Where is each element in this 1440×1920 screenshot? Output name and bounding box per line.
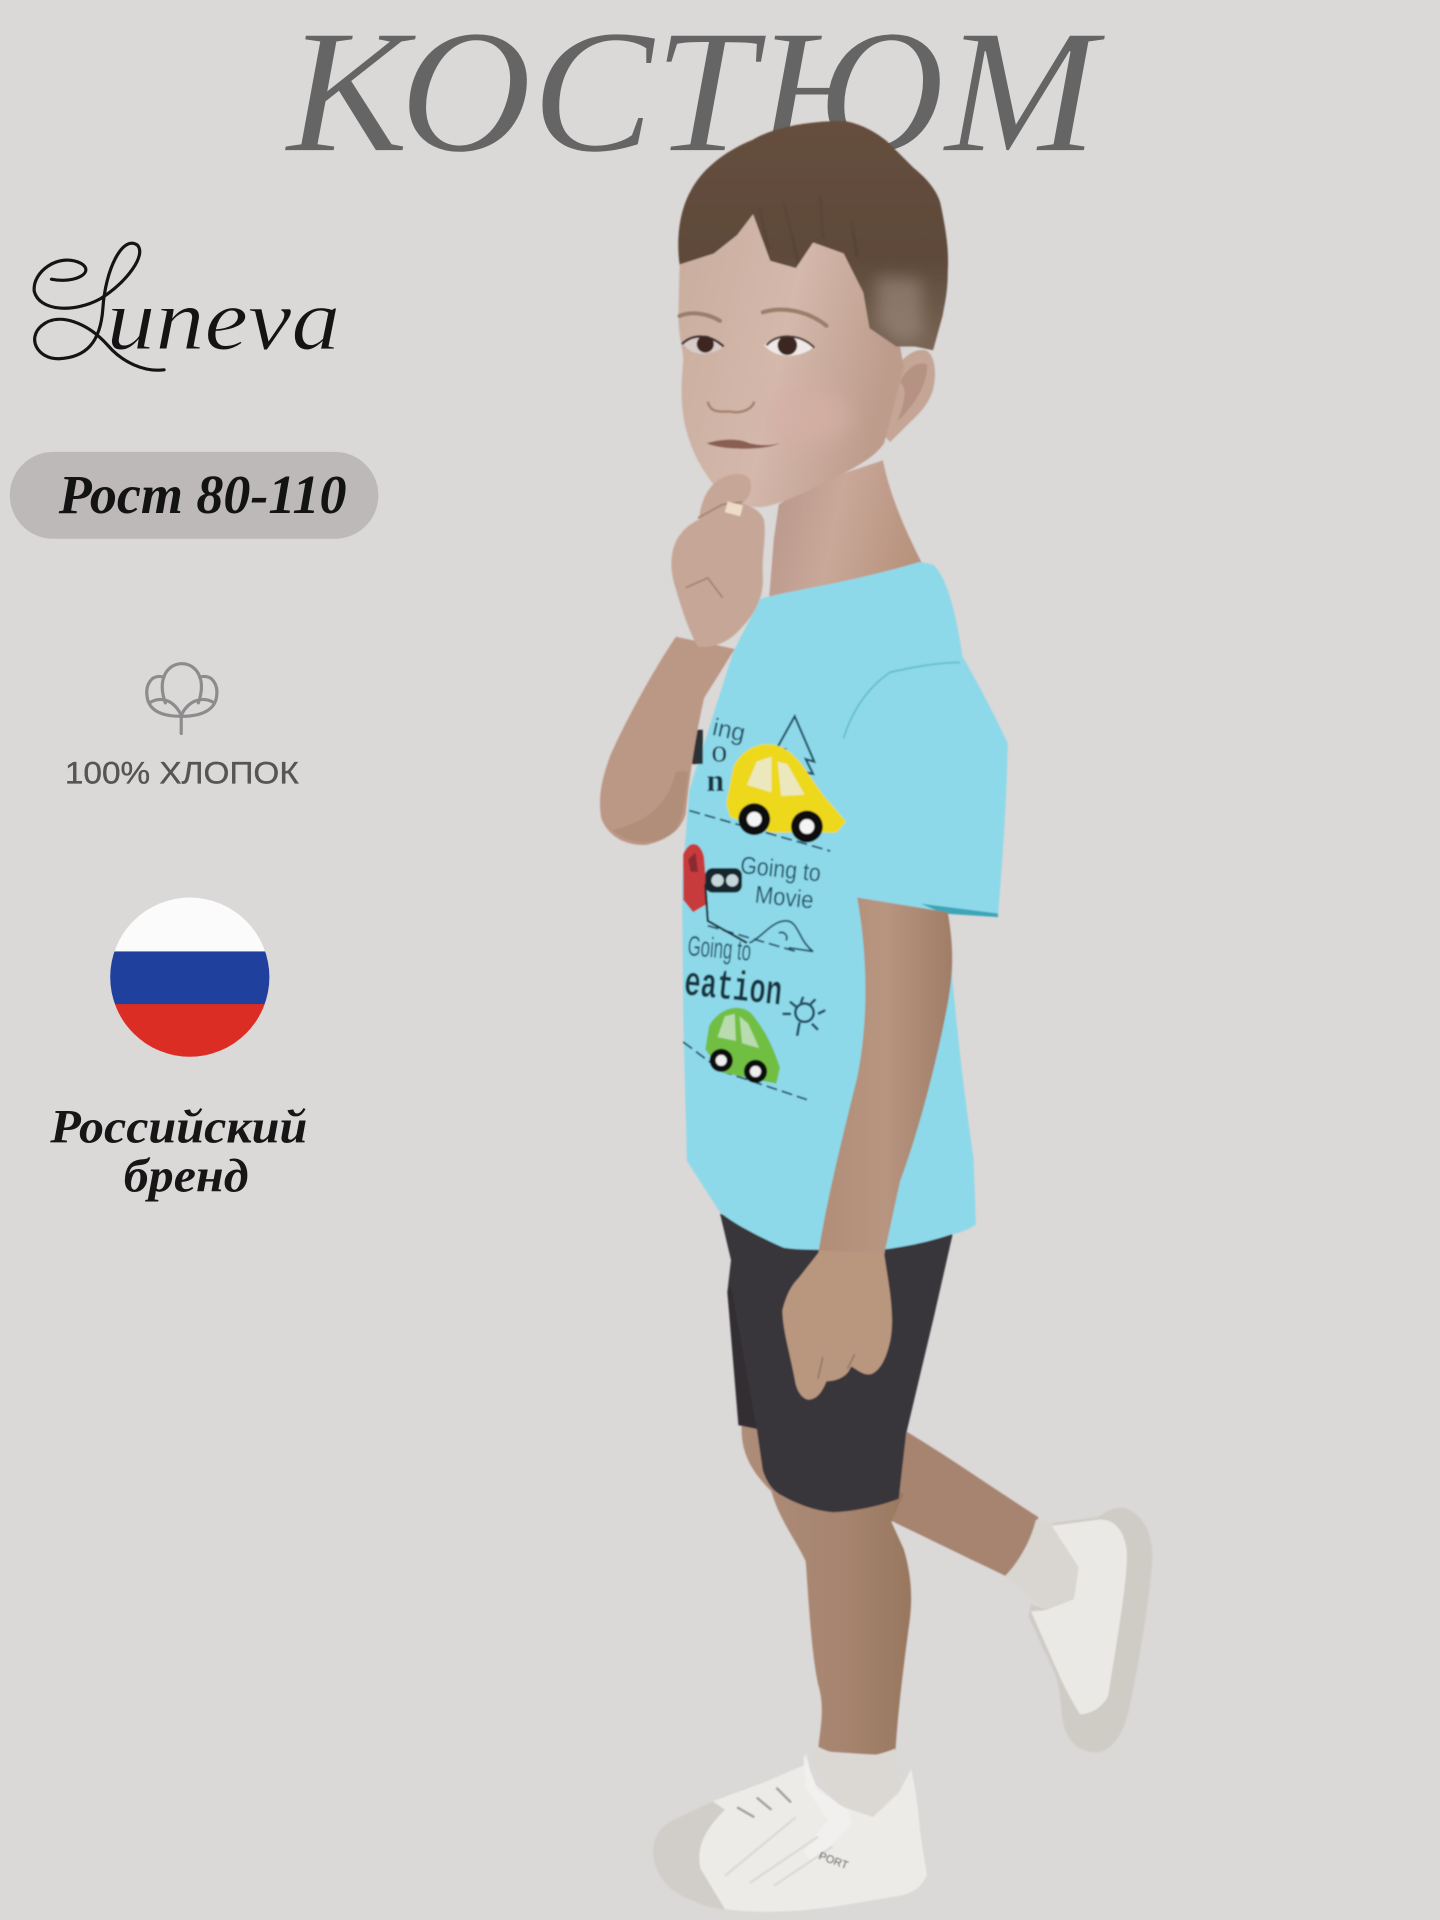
print: dark patch [689,730,703,764]
cotton label: 100% ХЛОПОК [65,755,299,791]
sleeve seam [844,662,960,738]
title: КОСТЮМ [283,0,1106,190]
finger creases [686,502,742,598]
right eye [764,336,814,356]
ing: ing [710,714,748,747]
shirt body [682,562,1008,1250]
front shoe stripes [725,1817,833,1886]
t-shirt print [682,714,846,1100]
yellow car wheels [738,803,770,835]
print: tree [774,716,814,774]
nose [708,402,754,412]
front shoe lettering: PORT [817,1850,850,1872]
front leg [742,1418,911,1756]
green car body [705,1008,780,1084]
print: green car [705,1008,780,1084]
near arm [818,898,952,1255]
bent arm shading [612,771,688,842]
back shoe upper [1031,1520,1127,1714]
print: hill [749,921,813,951]
eyebrows [680,310,827,326]
traffic light box [705,868,742,893]
brand logo [34,243,340,370]
front shoe strap [803,1753,852,1864]
print: going to movie text [739,852,822,915]
ear shape [873,350,935,442]
hair fade patch [877,277,923,343]
red car windows [688,852,698,872]
print: going to text: Going to [686,930,753,967]
front shoe upper [653,1751,927,1912]
face [678,214,904,507]
back leg [891,1431,1038,1576]
n: n [707,763,725,798]
print: traffic light [705,868,747,943]
sleeve inner hem [921,904,998,917]
logo wordmark: uneva [107,271,340,369]
fist shape [671,474,765,647]
russian brand text: бренд [124,1149,249,1202]
russian brand text: Российский [49,1100,307,1153]
left eye white [683,337,722,354]
hair strands [759,196,857,263]
bent arm [600,637,735,845]
yellow car body [726,744,846,833]
back sock [1005,1520,1079,1609]
cotton feature [65,664,299,791]
left iris [697,336,714,353]
traffic light lamps [711,874,724,887]
front shoe laces [737,1788,791,1817]
badge text: Рост 80-110 [58,464,347,525]
icon: cotton boll [147,664,217,733]
mouth [707,440,780,449]
o: o [711,734,727,769]
front shoe toe cap [653,1801,725,1909]
icon: russian flag [110,898,270,1057]
near hand [782,1250,892,1400]
shorts [720,1213,953,1512]
front sock [809,1746,900,1817]
red car body [683,844,708,912]
right eye white [764,336,813,356]
print: yellow car [726,744,846,842]
neck [769,460,923,600]
inner ear [898,363,927,421]
hand finger creases [818,1354,855,1379]
movie: Movie [754,882,815,915]
head [678,121,948,507]
back shoe sole [1029,1508,1152,1752]
hair [678,121,948,350]
badge pill [10,452,378,539]
print: sun [782,997,825,1036]
ear [873,350,935,442]
print: recreation text: eation [682,959,784,1017]
height badge [10,452,378,539]
yellow car windows [747,757,804,796]
right lash [767,336,814,348]
right iris [778,336,797,355]
print: red car [683,844,708,912]
green car windows [718,1014,759,1048]
green car wheels [710,1049,733,1072]
back shoe [1029,1508,1152,1752]
logo flourish [34,243,164,370]
cheek blush [767,387,850,446]
t-shirt [682,562,1008,1250]
front shoe [653,1751,927,1912]
left lash [682,337,724,347]
traffic light pole [705,884,747,943]
boy figure [600,121,1152,1912]
shorts shadow [727,1286,757,1429]
fist [671,474,765,647]
left eye [682,336,724,354]
going to: Going to [739,852,822,887]
print: going to town text [707,714,748,798]
ring [725,502,743,516]
print dashed road lines [683,811,830,1100]
